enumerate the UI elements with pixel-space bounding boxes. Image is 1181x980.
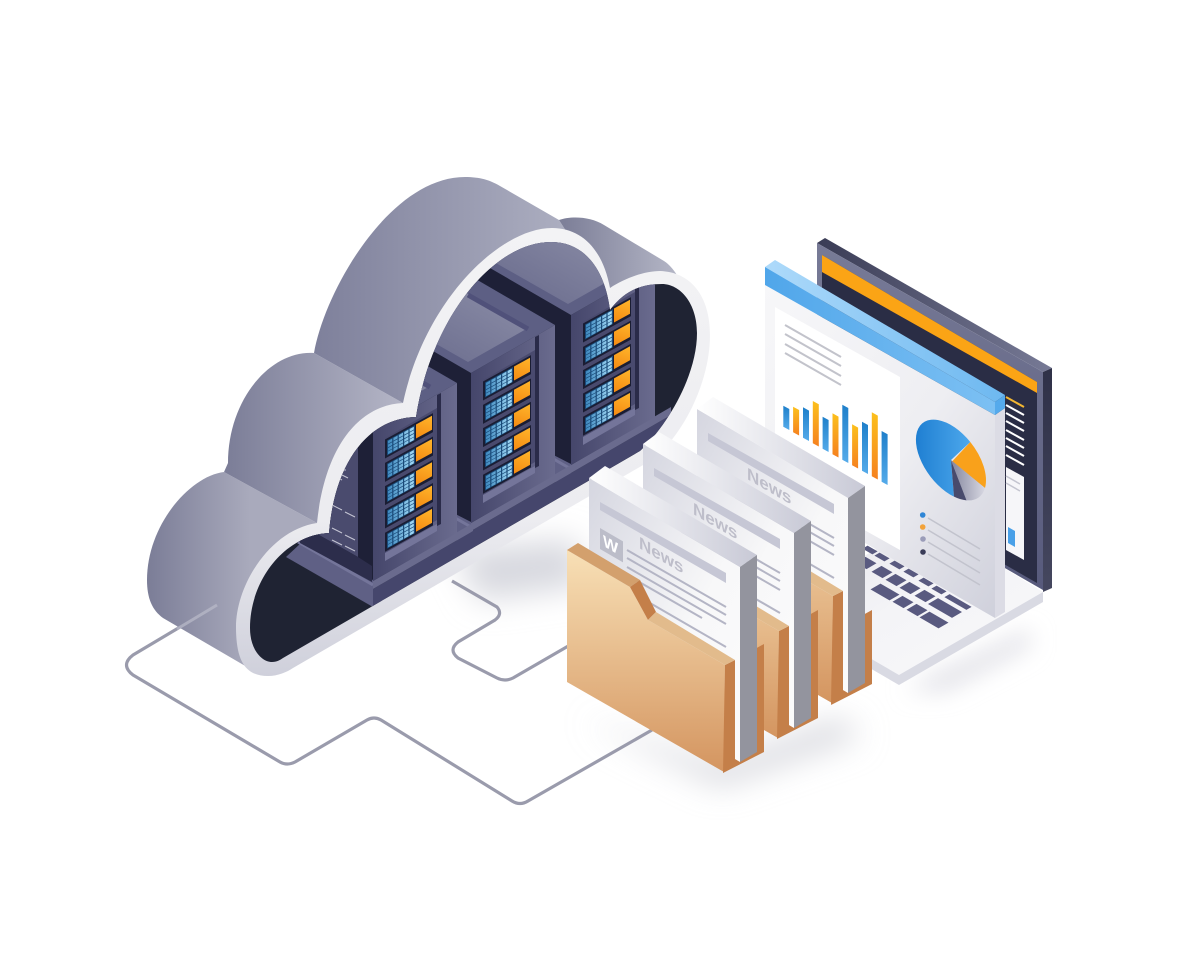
folder 1 front: [567, 543, 735, 773]
doc 1 W badge: [600, 528, 623, 562]
cloud back: middle lobe: [224, 353, 403, 523]
wire seen through cloud: [177, 605, 217, 629]
folder 1 lip: [648, 612, 735, 665]
folder 3 back wall: [831, 610, 872, 705]
white chart pane: [775, 307, 900, 550]
window side: [995, 408, 1005, 618]
folder 1 tab top: [567, 543, 640, 587]
cloud back: big lobe: [314, 177, 610, 403]
server rack middle: [371, 267, 571, 549]
server left side panel: [300, 448, 372, 582]
folder 1 back wall: [723, 644, 764, 773]
connection wire to cloud: [126, 605, 652, 804]
window blue title bar: [765, 260, 1005, 415]
document 2: News: [693, 498, 737, 543]
laptop screen: [817, 238, 1052, 592]
cloud back: right lobe: [559, 217, 680, 300]
ground shadows: [455, 540, 1030, 785]
folder 2 front: [621, 516, 789, 739]
analytics window panel: [765, 260, 1005, 618]
cloud back: lower left lobe: [147, 472, 317, 667]
news folder back: [567, 397, 872, 773]
screen text stripes: [1006, 397, 1024, 465]
doc 1 headline bar: [600, 502, 726, 583]
doc 1 text lines: [627, 550, 726, 647]
doc 1 top: [589, 466, 757, 567]
pane text lines: [785, 325, 841, 385]
document 3: [697, 397, 865, 693]
keyboard: [856, 546, 972, 628]
pie chart: [916, 405, 986, 515]
laptop: [780, 238, 1052, 685]
doc 1 W badge: W: [603, 531, 619, 559]
folder 1 panel: [567, 550, 725, 772]
laptop base: [780, 592, 1043, 685]
folder 3 front: [675, 481, 843, 704]
doc 1 front face: [589, 478, 740, 762]
folder 1 tab fold: [630, 580, 656, 620]
cloud front rim: [236, 228, 710, 676]
pie legend: [920, 512, 980, 585]
cloud with servers: [147, 177, 710, 676]
inner connection wire: [452, 581, 570, 680]
document 3: News: [747, 463, 791, 508]
doc 1 side: [740, 555, 757, 762]
cloud hole interior: [250, 242, 697, 662]
doc 1 news title: News: [639, 532, 683, 577]
screen pane lines: [1006, 476, 1020, 491]
bar chart: [783, 401, 888, 485]
screen blue block: [1008, 527, 1015, 547]
folder 1 edge: [723, 660, 735, 773]
server rack right: [471, 242, 671, 490]
document 2: [643, 432, 811, 728]
screen orange strip: [822, 255, 1037, 393]
folder 2 back wall: [777, 610, 818, 739]
window body: [765, 285, 995, 618]
screen white pane: [1006, 467, 1024, 560]
servers inside cloud: [286, 242, 671, 606]
server rack left: [286, 366, 473, 606]
document 1: [589, 466, 757, 762]
